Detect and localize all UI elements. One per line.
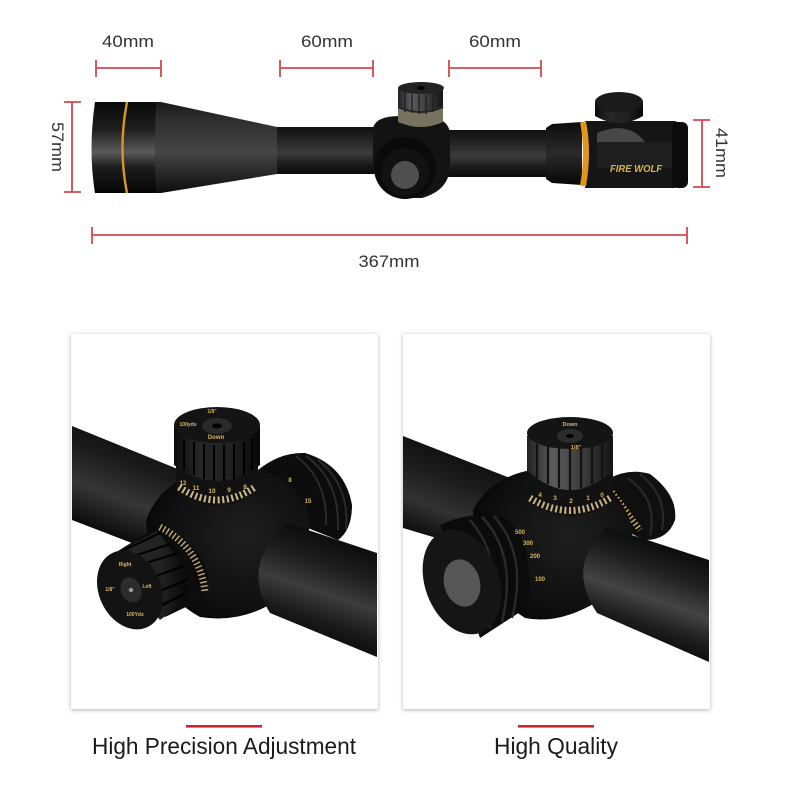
front parallax knob [409,515,546,645]
saddle [473,468,632,620]
top knob: 3 [553,495,557,502]
objective bell [92,102,277,193]
dimension: 60mm right: 60mm [469,32,521,51]
right tube [583,527,709,662]
top knob [527,417,613,516]
main tube [277,127,377,174]
illumination knob [595,92,643,123]
top knob: 1/8" [571,445,582,451]
top knob: Down [563,422,578,428]
top knob: 100yds [180,422,197,428]
top windage knob [398,82,444,127]
front parallax knob: 300 [523,541,534,547]
dimension: 60mm left [280,32,373,77]
dimension: 57mm: 57mm [48,122,67,172]
back knob [258,453,352,540]
top knob: 0 [600,492,604,499]
front left knob: 1/8" [105,587,115,593]
top knob: 11 [193,485,200,492]
front parallax knob: 200 [530,554,541,560]
dimension: 57mm [48,102,81,192]
left tube [72,426,190,550]
top knob: 4 [538,492,542,499]
front left knob: Left [142,584,152,590]
front parallax knob: 100 [535,577,546,583]
front left knob: Right [119,562,132,568]
caption: high precision adjustment: High Precision Adjustment [92,733,357,759]
saddle [146,468,309,618]
top knob: Down [208,435,224,441]
dimension: 367mm: 367mm [358,252,420,271]
top knob: 10 [208,488,216,495]
top knob: 8 [243,484,247,491]
caption: high quality: High Quality [494,733,618,759]
left tube [403,436,510,548]
turret saddle [373,116,450,198]
front elevation knob [374,137,436,199]
dimension: 60mm right [449,32,541,77]
front left knob: 100Yds [126,612,144,618]
top knob: 2 [569,498,573,505]
eyepiece ring [546,122,582,185]
top knob: 1/8" [207,409,217,415]
dimension: 41mm: 41mm [712,128,731,178]
dimension: 40mm [96,32,161,77]
panel: high precision adjustment [71,334,378,709]
side view scope illustration [92,82,688,199]
brand text: FIRE WOLF [610,163,663,175]
front parallax knob: 500 [515,530,526,536]
accent line: right caption [518,725,594,728]
top knob: 1 [586,495,590,502]
dimension: 41mm [693,120,731,187]
accent line: left caption [186,725,262,728]
back knob: 15 [305,499,312,505]
dimension: 367mm [92,227,687,271]
dimension: 60mm left: 60mm [301,32,353,51]
panel: high quality [403,334,710,709]
top knob: 12 [180,481,187,487]
back knob: 8 [288,478,292,484]
right tube [258,523,377,657]
top knob: 9 [227,487,231,494]
front left knob [85,527,208,640]
back knob [610,472,675,540]
dimension: 40mm: 40mm [102,32,154,51]
top knob [174,407,260,506]
eyepiece body [583,92,688,188]
